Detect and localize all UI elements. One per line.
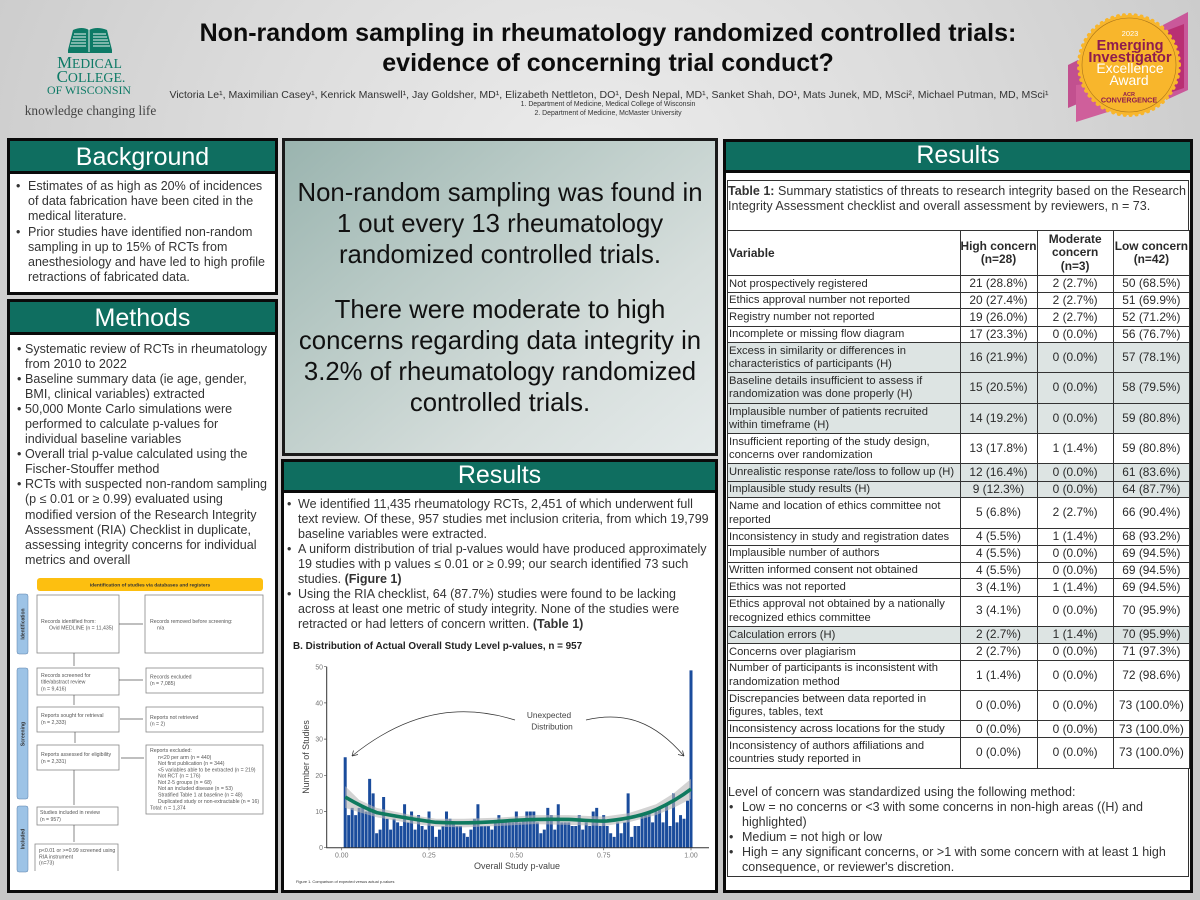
- table: threats to research integrity: 20 (27.4%): [969, 293, 1028, 307]
- table: threats to research integrity: Insufficient reporting of the study design,: [729, 436, 930, 448]
- text block: results bullets: We identified 11,435 rheumatology RCTs, 2,451 of which underwent full: [298, 497, 693, 511]
- text block: level of concern legend: •: [729, 845, 733, 859]
- table: threats to research integrity: 70 (95.9%): [1122, 603, 1180, 617]
- text block: methods bullets: •: [17, 342, 21, 356]
- table: threats to research integrity: 50 (68.5%): [1122, 276, 1180, 290]
- panel: key findings callout: [282, 138, 718, 456]
- badge: 2023 Emerging Investigator Excellence Award: Award: [1109, 72, 1149, 88]
- table: threats to research integrity: 70 (95.9%): [1122, 627, 1180, 641]
- table: threats to research integrity: Discrepancies between data reported in: [729, 693, 926, 705]
- text block: background bullets: sampling in up to 15% of RCTs from: [28, 240, 227, 254]
- chart: PRISMA flow diagram: Stratified Table 1 at baseline (n = 48): [158, 792, 243, 798]
- table: threats to research integrity: 0 (0.0%): [1053, 546, 1098, 560]
- table: threats to research integrity: 64 (87.7%): [1122, 482, 1180, 496]
- chart: distribution of overall study p-values: [293, 641, 709, 871]
- text block: background bullets: Prior studies have identified non-random: [28, 225, 252, 239]
- chart: distribution of overall study p-values: 0: [319, 845, 323, 852]
- text block: background bullets: anesthesiology and have led to high profile: [28, 255, 265, 269]
- chart: PRISMA flow diagram: Records removed before screening:: [150, 619, 232, 625]
- badge: 2023 Emerging Investigator Excellence Award: Investigator: [1088, 50, 1172, 66]
- text block: key finding two: controlled trials.: [410, 389, 590, 417]
- chart: PRISMA flow diagram: (n=73): [39, 860, 54, 866]
- table: threats to research integrity: 15 (20.5%): [969, 380, 1028, 394]
- table: threats to research integrity: 17 (23.3%): [969, 327, 1028, 341]
- table: threats to research integrity: 13 (17.8%): [969, 441, 1028, 455]
- table: threats to research integrity: 0 (0.0%): [1053, 350, 1098, 364]
- table: threats to research integrity: 3 (4.1%): [976, 603, 1021, 617]
- table: threats to research integrity: 4 (5.5%): [976, 563, 1021, 577]
- table: threats to research integrity: Ethics approval not obtained by a nationally: [729, 598, 945, 610]
- table: threats to research integrity: Moderate: [1049, 232, 1102, 246]
- logo: Medical College of Wisconsin: COLLEGE.: [57, 67, 125, 86]
- text block: methods bullets: Assessment (RIA) Checklist in duplicate,: [25, 523, 251, 537]
- text block: level of concern legend: High = any significant concerns, or >1 with some concern with at least 1 high: [742, 845, 1166, 859]
- table: threats to research integrity: 5 (6.8%): [976, 505, 1021, 519]
- title: [200, 19, 1016, 77]
- text block: methods bullets: [17, 342, 267, 567]
- chart: distribution of overall study p-values: Overall Study p-value: [474, 861, 560, 871]
- text block: background bullets: •: [16, 179, 20, 193]
- heading: Results: Results: [458, 461, 541, 489]
- table: threats to research integrity: 0 (0.0%): [1053, 745, 1098, 759]
- text block: level of concern legend: highlighted): [742, 815, 807, 829]
- text block: key finding two: 3.2% of rheumatology randomized: [304, 358, 696, 386]
- text block: methods bullets: •: [17, 477, 21, 491]
- table: threats to research integrity: Inconsistency across locations for the study: [729, 723, 945, 735]
- table: threats to research integrity: 69 (94.5%): [1122, 580, 1180, 594]
- table: threats to research integrity: Not prospectively registered: [729, 278, 868, 290]
- chart: PRISMA flow diagram: (n = 7,085): [150, 681, 176, 687]
- text block: background bullets: medical literature.: [28, 209, 127, 223]
- table: threats to research integrity: 0 (0.0%): [976, 745, 1021, 759]
- chart: distribution of overall study p-values: 0.50: [510, 852, 523, 860]
- heading: Methods: Methods: [95, 304, 190, 332]
- chart: PRISMA flow diagram: (n = 2): [150, 722, 165, 728]
- table: threats to research integrity: Inconsistency in study and registration dates: [729, 531, 949, 543]
- text block: methods bullets: •: [17, 447, 21, 461]
- chart: PRISMA flow diagram: (n = 2,333): [41, 720, 67, 726]
- table: threats to research integrity: Concerns over plagiarism: [729, 646, 856, 658]
- table: threats to research integrity: characteristics of participants (H): [729, 358, 892, 370]
- table: threats to research integrity: 57 (78.1%): [1122, 350, 1180, 364]
- table: threats to research integrity: High concern: [960, 239, 1036, 253]
- table: threats to research integrity: 73 (100.0%): [1119, 698, 1184, 712]
- text block: methods bullets: assessing integrity concerns for individual: [25, 538, 257, 552]
- text block: results bullets: •: [287, 497, 291, 511]
- text block: key finding one: 1 out every 13 rheumatology: [337, 210, 663, 238]
- logo: Medical College of Wisconsin: knowledge changing life: [25, 103, 156, 118]
- chart: PRISMA flow diagram: Not an included disease (n = 53): [158, 786, 233, 792]
- table title box: [727, 180, 1189, 231]
- text block: results bullets: studies. (Figure 1): [298, 572, 402, 586]
- table: threats to research integrity: Number of participants is inconsistent with: [729, 662, 938, 674]
- heading: Results: [284, 462, 715, 493]
- table: threats to research integrity: 69 (94.5%): [1122, 546, 1180, 560]
- text block: key finding one: Non-random sampling was found in: [297, 179, 703, 207]
- chart: PRISMA flow diagram: [16, 578, 264, 872]
- table: threats to research integrity: 9 (12.3%): [973, 482, 1024, 496]
- table: threats to research integrity: 0 (0.0%): [1053, 698, 1098, 712]
- text block: background bullets: of data fabrication have been cited in the: [28, 194, 253, 208]
- table: threats to research integrity: 2 (2.7%): [1053, 505, 1098, 519]
- badge: 2023 Emerging Investigator Excellence Award: Excellence: [1096, 60, 1164, 76]
- chart: PRISMA flow diagram: Not first publication (n = 344): [158, 761, 225, 767]
- chart: PRISMA flow diagram: Reports excluded:: [150, 748, 192, 754]
- chart: PRISMA flow diagram: Duplicated study or non-extractable (n = 16): [158, 799, 259, 805]
- chart: distribution of overall study p-values: 20: [315, 773, 323, 780]
- chart: PRISMA flow diagram: Screening: [20, 722, 26, 746]
- panel: methods: [7, 299, 278, 893]
- text block: results bullets: •: [287, 587, 291, 601]
- table: threats to research integrity: Baseline details insufficient to assess if: [729, 375, 922, 387]
- table: threats to research integrity: 0 (0.0%): [1053, 380, 1098, 394]
- chart: PRISMA flow diagram: Not RCT (n = 176): [158, 774, 201, 780]
- text block: methods bullets: from 2010 to 2022: [25, 357, 127, 371]
- table: threats to research integrity: 72 (98.6%): [1122, 668, 1180, 682]
- table: threats to research integrity: 0 (0.0%): [976, 698, 1021, 712]
- text block: results bullets: across at least one metric of study integrity. None of the studies were: [298, 602, 679, 616]
- table: threats to research integrity: Registry number not reported: [729, 311, 875, 323]
- table title box: Integrity Assessment checklist and overall assessment by reviewers, n = 73.: [728, 199, 1150, 213]
- text block: results bullets: text review. Of these, 957 studies met inclusion criteria, from which 19,799: [298, 512, 709, 526]
- panel: results table: [723, 139, 1193, 893]
- chart: PRISMA flow diagram: Records screened for: [41, 673, 91, 679]
- table: threats to research integrity: recognized ethics committee: [729, 612, 871, 624]
- chart: distribution of overall study p-values: 0.00: [335, 852, 349, 860]
- table: threats to research integrity: within timeframe (H): [729, 419, 829, 431]
- chart: PRISMA flow diagram: Identification: [20, 608, 26, 640]
- table: threats to research integrity: 19 (26.0%): [969, 310, 1028, 324]
- panel: results summary: [281, 459, 718, 893]
- annotation: unexpected distribution arrows: Unexpected: [527, 710, 572, 720]
- text block: level of concern legend: •: [729, 830, 733, 844]
- figure caption: Figure 1. Comparison of expected versus actual p-values: [296, 879, 394, 884]
- text block: background bullets: retractions of fabricated data.: [28, 270, 190, 284]
- title: evidence of concerning trial conduct?: [382, 49, 834, 77]
- chart: PRISMA flow diagram: Reports sought for retrieval: [41, 713, 104, 719]
- table: threats to research integrity: Name and location of ethics committee not: [729, 500, 940, 512]
- table: threats to research integrity: 14 (19.2%): [969, 411, 1028, 425]
- table: threats to research integrity: (n=42): [1134, 252, 1169, 266]
- logo: Medical College of Wisconsin: [25, 28, 156, 118]
- text block: methods bullets: (p ≤ 0.01 or ≥ 0.99) evaluated using: [25, 492, 223, 506]
- chart: PRISMA flow diagram: n<20 per arm (n = 440): [158, 755, 212, 761]
- chart: PRISMA flow diagram: (n = 957): [40, 817, 61, 823]
- text block: methods bullets: Systematic review of RCTs in rheumatology: [25, 342, 267, 356]
- heading: Methods: [10, 302, 275, 335]
- title: Non-random sampling in rheumatology randomized controlled trials:: [200, 19, 1016, 47]
- chart: PRISMA flow diagram: Not 2-5 groups (n = 68): [158, 780, 212, 786]
- table: threats to research integrity: Incomplete or missing flow diagram: [729, 328, 904, 340]
- table: threats to research integrity: [727, 230, 1190, 769]
- chart: distribution of overall study p-values: 10: [315, 809, 323, 816]
- text block: level of concern legend: Level of concern was standardized using the following method:: [728, 785, 1075, 799]
- chart: PRISMA flow diagram: (n = 2,331): [41, 759, 67, 765]
- text block: methods bullets: metrics and overall: [25, 553, 130, 567]
- badge: 2023 Emerging Investigator Excellence Award: CONVERGENCE: [1101, 96, 1157, 104]
- table: threats to research integrity: 1 (1.4%): [976, 668, 1021, 682]
- logo: Medical College of Wisconsin: MEDICAL: [57, 53, 122, 72]
- text block: level of concern legend: Medium = not high or low: [742, 830, 882, 844]
- table: threats to research integrity: 2 (2.7%): [976, 644, 1021, 658]
- chart: PRISMA flow diagram: <5 variables able to be extracted (n = 219): [158, 768, 256, 774]
- table: threats to research integrity: 0 (0.0%): [1053, 563, 1098, 577]
- table: threats to research integrity: 1 (1.4%): [1053, 441, 1098, 455]
- annotation: unexpected distribution arrows: Distribution: [531, 722, 573, 732]
- table: threats to research integrity: 0 (0.0%): [1053, 327, 1098, 341]
- chart: PRISMA flow diagram: Total: n = 1,374: [150, 806, 186, 812]
- table: threats to research integrity: 0 (0.0%): [1053, 668, 1098, 682]
- badge: 2023 Emerging Investigator Excellence Award: [1068, 12, 1188, 122]
- chart: distribution of overall study p-values: 0.25: [422, 852, 436, 860]
- table: threats to research integrity: 3 (4.1%): [976, 580, 1021, 594]
- table: threats to research integrity: 59 (80.8%): [1122, 411, 1180, 425]
- logo: Medical College of Wisconsin: OF WISCONSIN: [47, 83, 131, 97]
- chart: PRISMA flow diagram: Reports not retrieved: [150, 715, 199, 721]
- table: threats to research integrity: 0 (0.0%): [976, 722, 1021, 736]
- text block: methods bullets: Overall trial p-value calculated using the: [25, 447, 247, 461]
- table: threats to research integrity: concern: [1052, 245, 1098, 259]
- table: threats to research integrity: 0 (0.0%): [1053, 644, 1098, 658]
- text block: key finding one: randomized controlled trials.: [339, 241, 661, 269]
- table: threats to research integrity: 2 (2.7%): [1053, 276, 1098, 290]
- table: threats to research integrity: 2 (2.7%): [1053, 310, 1098, 324]
- table: threats to research integrity: 58 (79.5%): [1122, 380, 1180, 394]
- table: threats to research integrity: 71 (97.3%): [1122, 644, 1180, 658]
- text block: results bullets: •: [287, 542, 291, 556]
- text block: results bullets: 19 studies with p values ≤ 0.01 or ≥ 0.99; our search identified 73 such: [298, 557, 688, 571]
- chart: distribution of overall study p-values: Number of Studies: [301, 720, 311, 794]
- table: threats to research integrity: randomization method: [729, 676, 840, 688]
- affiliations: 2. Department of Medicine, McMaster University: [534, 110, 682, 117]
- table: threats to research integrity: reported: [729, 514, 771, 526]
- table title box: Table 1: Summary statistics of threats to research integrity based on the Research: [728, 184, 1186, 198]
- text block: key finding one: [297, 179, 703, 269]
- panel: background: [7, 138, 278, 295]
- heading: Results: [726, 142, 1190, 173]
- chart: distribution of overall study p-values: 1.00: [684, 852, 698, 860]
- table: threats to research integrity: 2 (2.7%): [1053, 293, 1098, 307]
- text block: level of concern legend: [727, 768, 1189, 877]
- table: threats to research integrity: 4 (5.5%): [976, 546, 1021, 560]
- table: threats to research integrity: (n=3): [1061, 259, 1090, 273]
- table: threats to research integrity: Inconsistency of authors affiliations and: [729, 740, 924, 752]
- chart: PRISMA flow diagram: Ovid MEDLINE (n = 11,435): [49, 626, 114, 632]
- table: threats to research integrity: 1 (1.4%): [1053, 580, 1098, 594]
- table: threats to research integrity: Ethics was not reported: [729, 581, 846, 593]
- table: threats to research integrity: Written informed consent not obtained: [729, 564, 918, 576]
- table: threats to research integrity: 1 (1.4%): [1053, 627, 1098, 641]
- table: threats to research integrity: 59 (80.8%): [1122, 441, 1180, 455]
- table: threats to research integrity: 0 (0.0%): [1053, 603, 1098, 617]
- table: threats to research integrity: 12 (16.4%): [969, 465, 1028, 479]
- table: threats to research integrity: Implausible study results (H): [729, 483, 870, 495]
- chart: PRISMA flow diagram: Studies included in review: [40, 810, 100, 816]
- table: threats to research integrity: Excess in similarity or differences in: [729, 345, 906, 357]
- chart: distribution of overall study p-values: 0.75: [597, 852, 611, 860]
- badge: 2023 Emerging Investigator Excellence Award: Emerging: [1097, 38, 1163, 54]
- text block: methods bullets: •: [17, 402, 21, 416]
- chart: PRISMA flow diagram: Records excluded: [150, 674, 192, 680]
- chart title: B. Distribution of Actual Overall Study Level p-values, n = 957: [293, 641, 583, 652]
- table: threats to research integrity: 73 (100.0%): [1119, 722, 1184, 736]
- table: threats to research integrity: 16 (21.9%): [969, 350, 1028, 364]
- table: threats to research integrity: Unrealistic response rate/loss to follow up (H): [729, 466, 954, 478]
- chart: PRISMA flow diagram: Identification of studies via databases and registers: [90, 582, 210, 588]
- authors: Victoria Le¹, Maximilian Casey¹, Kenrick Manswell¹, Jay Goldsher, MD¹, Elizabeth Nettleton, DO¹, Desh Nepal, MD¹, Sanket Shah, DO¹, Mats Junek, MD, MSci², Michael Putman, MD, MSci¹: [170, 89, 1048, 101]
- chart: PRISMA flow diagram: n/a: [157, 626, 164, 632]
- badge: 2023 Emerging Investigator Excellence Award: ACR: [1123, 92, 1135, 98]
- table: threats to research integrity: Low concern: [1115, 239, 1188, 253]
- annotation: unexpected distribution arrows: [352, 710, 684, 756]
- text block: background bullets: Estimates of as high as 20% of incidences: [28, 179, 262, 193]
- table: threats to research integrity: Implausible number of authors: [729, 547, 880, 559]
- text block: methods bullets: RCTs with suspected non-random sampling: [25, 477, 267, 491]
- table: threats to research integrity: 52 (71.2%): [1122, 310, 1180, 324]
- table: threats to research integrity: 66 (90.4%): [1122, 505, 1180, 519]
- chart: PRISMA flow diagram: RIA instrument: [39, 854, 74, 860]
- table: threats to research integrity: 69 (94.5%): [1122, 563, 1180, 577]
- chart: distribution of overall study p-values: 50: [315, 664, 323, 672]
- text block: methods bullets: 50,000 Monte Carlo simulations were: [25, 402, 232, 416]
- table: threats to research integrity: concerns over randomization: [729, 449, 873, 461]
- text block: results bullets: Using the RIA checklist, 64 (87.7%) studies were found to be lacking: [298, 587, 676, 601]
- heading: Background: Background: [76, 143, 209, 171]
- badge: 2023 Emerging Investigator Excellence Award: 2023: [1122, 29, 1138, 38]
- text block: results bullets: A uniform distribution of trial p-values would have produced approximately: [298, 542, 707, 556]
- chart: PRISMA flow diagram: (n = 9,416): [41, 686, 67, 692]
- text block: methods bullets: individual baseline variables: [25, 432, 181, 446]
- text block: key finding two: [299, 296, 701, 417]
- table: threats to research integrity: 68 (93.2%): [1122, 529, 1180, 543]
- chart: PRISMA flow diagram: title/abstract review: [41, 680, 86, 686]
- chart: PRISMA flow diagram: Reports assessed for eligibility: [41, 752, 111, 758]
- table: threats to research integrity: 0 (0.0%): [1053, 482, 1098, 496]
- text block: methods bullets: •: [17, 372, 21, 386]
- table: threats to research integrity: randomization was done properly (H): [729, 388, 912, 400]
- table: threats to research integrity: 61 (83.6%): [1122, 465, 1180, 479]
- text block: level of concern legend: •: [729, 800, 733, 814]
- affiliations: 1. Department of Medicine, Medical College of Wisconsin: [521, 101, 695, 108]
- table: threats to research integrity: countries study reported in: [729, 753, 861, 765]
- heading: Background: [10, 141, 275, 174]
- text block: key finding two: concerns regarding data integrity in: [299, 327, 701, 355]
- table: threats to research integrity: Calculation errors (H): [729, 629, 835, 641]
- text block: results bullets: baseline variables were extracted.: [298, 527, 487, 541]
- table: threats to research integrity: 0 (0.0%): [1053, 722, 1098, 736]
- chart: PRISMA flow diagram: p<0.01 or >=0.99 screened using: [39, 848, 115, 854]
- table: threats to research integrity: 2 (2.7%): [976, 627, 1021, 641]
- table: threats to research integrity: Ethics approval number not reported: [729, 294, 910, 306]
- table: threats to research integrity: Variable: [729, 246, 775, 260]
- chart: distribution of overall study p-values: 40: [315, 700, 323, 708]
- text block: level of concern legend: Low = no concerns or <3 with some concerns in non-high areas ((H) and: [742, 800, 1143, 814]
- table: threats to research integrity: 56 (76.7%): [1122, 327, 1180, 341]
- chart: distribution of overall study p-values: 30: [315, 736, 323, 744]
- chart: PRISMA flow diagram: Records identified from:: [41, 619, 96, 625]
- text block: methods bullets: Fischer-Stouffer method: [25, 462, 159, 476]
- table: threats to research integrity: 1 (1.4%): [1053, 529, 1098, 543]
- text block: methods bullets: performed to calculate p-values for: [25, 417, 218, 431]
- table: threats to research integrity: 51 (69.9%): [1122, 293, 1180, 307]
- text block: methods bullets: Baseline summary data (ie age, gender,: [25, 372, 247, 386]
- table: threats to research integrity: 4 (5.5%): [976, 529, 1021, 543]
- table: threats to research integrity: 0 (0.0%): [1053, 411, 1098, 425]
- text block: level of concern legend: consequence, or reviewer's discretion.: [742, 860, 954, 874]
- text block: methods bullets: modified version of the Research Integrity: [25, 508, 257, 522]
- text block: background bullets: •: [16, 225, 20, 239]
- heading: Results: Results: [916, 141, 1000, 169]
- text block: results bullets: retracted or had letters of concern written. (Table 1): [298, 617, 583, 631]
- text block: key finding two: There were moderate to high: [335, 296, 665, 324]
- table: threats to research integrity: 0 (0.0%): [1053, 465, 1098, 479]
- affiliations: [521, 100, 695, 117]
- table: threats to research integrity: 21 (28.8%): [969, 276, 1028, 290]
- table: threats to research integrity: 73 (100.0%): [1119, 745, 1184, 759]
- table: threats to research integrity: (n=28): [981, 252, 1016, 266]
- table: threats to research integrity: figures, tables, text: [729, 706, 823, 718]
- text block: methods bullets: BMI, clinical variables) extracted: [25, 387, 205, 401]
- table: threats to research integrity: Implausible number of patients recruited: [729, 406, 928, 418]
- text block: background bullets: [16, 179, 265, 284]
- text block: results bullets: [287, 497, 709, 631]
- chart: PRISMA flow diagram: Included: [20, 829, 26, 849]
